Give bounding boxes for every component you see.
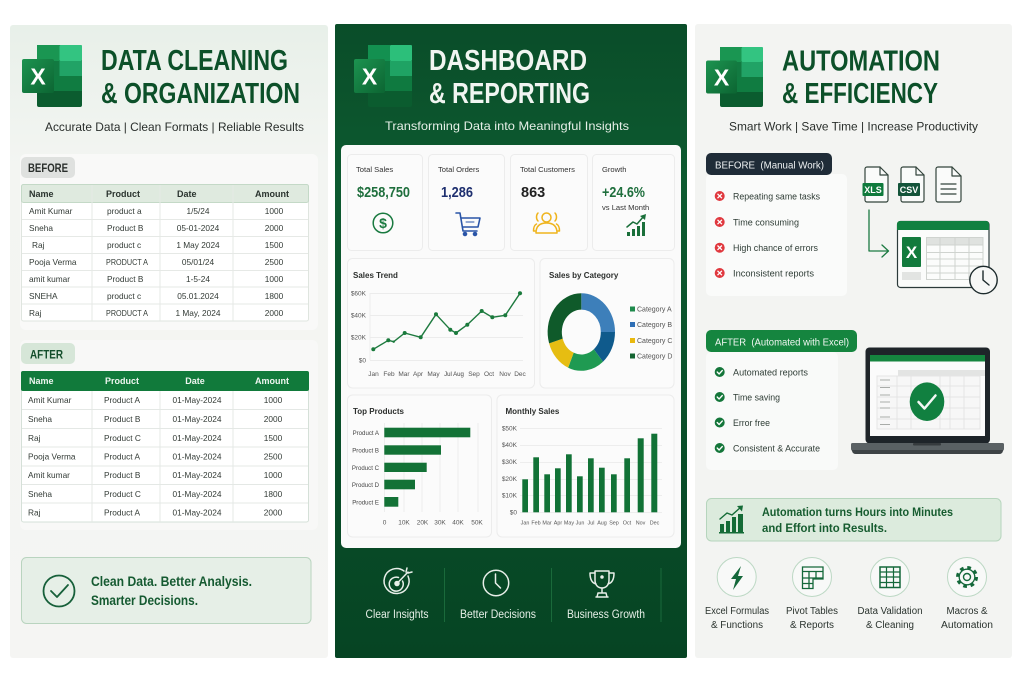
item: error free [715, 418, 770, 429]
chart: top products: Product E [352, 500, 379, 506]
legend: Category B [637, 322, 672, 329]
table: after: Pooja Verma [28, 452, 76, 462]
tag: before: BEFORE [28, 163, 68, 175]
table: after: Product C [104, 489, 141, 499]
benefit: clear insights [366, 568, 429, 621]
feature: data validation [858, 558, 922, 631]
chart: sales trend: $0 [359, 358, 366, 364]
icon: gear [948, 558, 986, 596]
table: after: Raj [28, 508, 41, 518]
chart: sales trend: Jan [368, 371, 379, 378]
table: after: Product A [104, 452, 140, 462]
table: before: Product [106, 189, 140, 199]
item: time consuming: Time consuming [733, 218, 799, 228]
illustration: laptop with check [851, 348, 1004, 454]
heading: data cleaning: & ORGANIZATION [101, 78, 300, 110]
icon: csv file: CSV [900, 185, 918, 195]
icon: trophy [590, 571, 614, 597]
panel: dashboard [335, 24, 687, 658]
chart: monthly sales: $40K [502, 442, 518, 449]
chart: top products: 20K [417, 520, 429, 526]
tag: after automated: AFTER (Automated with Excel) [715, 336, 849, 348]
heading: dashboard: DASHBOARD [429, 45, 587, 77]
chart: sales by category [540, 258, 674, 388]
icon: target [384, 568, 412, 594]
feature: pivot tables: Pivot Tables [786, 606, 838, 617]
chart: top products: 10K [398, 520, 410, 526]
table: before: amit kumar [29, 274, 70, 284]
table: after: Amount [255, 376, 289, 386]
chart: top products: 40K [452, 520, 464, 526]
table: after: 1000 [264, 470, 283, 480]
table: before: 2500 [265, 257, 284, 267]
subtitle: Smart Work | Save Time | Increase Productivity [729, 120, 978, 134]
tag: before manual work [706, 153, 832, 175]
chart: top products: Product D [352, 482, 380, 489]
icon: growth chart [719, 506, 744, 534]
item: error free: Error free [733, 418, 770, 429]
chart: sales trend: $60K [351, 290, 367, 298]
table: after: Amit Kumar [28, 395, 72, 405]
icon: excel logo [354, 45, 412, 107]
table: before: product c [107, 240, 141, 250]
before list [706, 153, 847, 296]
table: after: Product A [104, 508, 140, 518]
icon: csv file [898, 167, 924, 202]
table: after: Product C [104, 433, 141, 443]
chart: top products: 30K [434, 520, 446, 526]
chart: sales trend [348, 258, 534, 388]
table: before: 1/5/24 [186, 206, 210, 216]
table: after: 01-May-2024 [173, 414, 222, 424]
panel: data cleaning [10, 25, 328, 658]
chart: monthly sales: $10K [502, 492, 518, 500]
feature: pivot tables: & Reports [790, 620, 834, 631]
chart: sales trend: $20K [351, 334, 367, 342]
chart: monthly sales: Mar [542, 520, 552, 526]
chart: sales trend: Oct [484, 371, 494, 378]
table: after: Amit kumar [28, 470, 70, 480]
item: high chance of errors: High chance of errors [733, 243, 818, 254]
chart: top products: Product C [352, 465, 380, 472]
kpi: growth: +24.6% [602, 185, 645, 201]
kpi: total customers: Total Customers [520, 165, 575, 174]
chart: sales trend: Nov [499, 371, 512, 378]
table: before: product c [107, 291, 141, 301]
arrow: files to sheet [869, 210, 888, 257]
table: before: Amount [255, 189, 289, 199]
callout: clean data [22, 558, 311, 624]
feature: pivot tables [786, 558, 838, 631]
chart: monthly sales: Apr [554, 520, 562, 526]
table: before: Product B [107, 223, 144, 233]
table: before: PRODUCT A [106, 257, 148, 267]
table: before: 2000 [265, 308, 284, 318]
feature: excel formulas [705, 558, 769, 631]
table: after: 01-May-2024 [173, 470, 222, 480]
chart: sales trend: $40K [351, 312, 367, 320]
icon: people [534, 213, 560, 233]
legend: Category D [637, 354, 672, 360]
benefit: better decisions [460, 570, 536, 621]
heading: dashboard: & REPORTING [429, 78, 590, 110]
table: before: SNEHA [29, 291, 58, 301]
icon: grid [870, 558, 910, 596]
table: before: 2000 [265, 223, 284, 233]
table: after: Product [105, 376, 139, 386]
chart: sales trend: Dec [514, 371, 527, 378]
table: after: 01-May-2024 [173, 433, 222, 443]
table: after: 01-May-2024 [173, 508, 222, 518]
table: before: 05/01/24 [182, 257, 215, 267]
table: before: Amit Kumar [29, 206, 73, 216]
icon: xls file [862, 167, 888, 202]
heading: dashboard [429, 45, 590, 110]
item: inconsistent reports: Inconsistent reports [733, 268, 814, 280]
item: consistent and accurate: Consistent & Accurate [733, 444, 820, 454]
item: time saving [715, 392, 780, 404]
chart: top products: Top Products [353, 407, 405, 416]
icon: excel logo [706, 47, 763, 107]
callout: automation [706, 498, 1001, 541]
chart: monthly sales: $0 [510, 509, 517, 516]
chart: monthly sales: May [564, 520, 574, 526]
table: after: Product A [104, 395, 140, 405]
after list [706, 330, 857, 470]
chart: monthly sales: Nov [636, 520, 646, 526]
table: after [21, 371, 309, 522]
heading: data cleaning: DATA CLEANING [101, 45, 288, 77]
subtitle: Accurate Data | Clean Formats | Reliable Results [45, 120, 304, 134]
chart: monthly sales: Sep [609, 520, 619, 526]
table: before: Sneha [29, 223, 53, 233]
legend [630, 306, 672, 360]
icon: bolt [717, 558, 756, 596]
illustration: spreadsheet with clock: X [906, 243, 918, 262]
table: before: Name [29, 189, 54, 199]
table: before: 1500 [265, 240, 284, 250]
table: before: Pooja Verma [29, 257, 77, 267]
table: before: Date [177, 189, 197, 199]
table: after: Sneha [28, 414, 52, 424]
kpi: total orders: 1,286 [441, 185, 473, 201]
feature: data validation: & Cleaning [866, 620, 914, 631]
icon: excel logo [22, 45, 82, 107]
chart: top products: Product B [352, 448, 379, 454]
heading: automation: AUTOMATION [782, 46, 940, 78]
kpi: total sales: Total Sales [356, 165, 393, 174]
chart: monthly sales: $50K [502, 426, 518, 432]
chart: top products: 50K [471, 520, 483, 526]
table: after: 01-May-2024 [173, 452, 222, 462]
feature: excel formulas: Excel Formulas [705, 606, 769, 617]
kpi: total orders [428, 154, 504, 250]
table: after: Raj [28, 433, 41, 443]
icon: cart [456, 213, 480, 236]
tag: after: AFTER [30, 350, 64, 362]
tag: before [21, 157, 75, 178]
callout text [91, 574, 252, 608]
table: after: Date [185, 376, 205, 386]
chart: monthly sales: Jan [521, 520, 529, 526]
chart: monthly sales: $20K [502, 476, 518, 483]
chart: sales trend: May [427, 371, 440, 378]
chart: monthly sales: $30K [502, 459, 518, 466]
callout text [762, 505, 953, 535]
icon: check circle [44, 576, 74, 606]
table: before: 1000 [265, 206, 284, 216]
kpi: total sales [348, 154, 422, 250]
kpi: growth: Growth [602, 165, 626, 174]
chart: sales by category: Sales by Category [549, 271, 619, 280]
item: time saving: Time saving [733, 392, 780, 404]
feature: macros [941, 558, 993, 631]
item: automated reports: Automated reports [733, 368, 808, 378]
icon: document [936, 167, 961, 202]
illustration: spreadsheet with clock [897, 221, 997, 294]
table: before: 1 May, 2024 [175, 308, 221, 318]
icon: dollar: $ [379, 215, 387, 231]
kpi: total customers [510, 154, 588, 250]
kpi: growth [592, 154, 674, 250]
item: repeating same tasks: Repeating same tasks [733, 192, 820, 202]
chart: top products: 0 [383, 520, 387, 526]
legend: Category A [637, 306, 672, 314]
heading: automation [782, 46, 940, 110]
table: after: 2500 [264, 452, 283, 462]
feature: data validation: Data Validation [858, 606, 922, 617]
feature: excel formulas: & Functions [711, 620, 763, 631]
chart: top products [348, 395, 492, 537]
table: after: Product B [104, 470, 141, 480]
chart: monthly sales: Dec [650, 520, 660, 526]
benefit: better decisions: Better Decisions [460, 609, 536, 621]
table: before: Product B [107, 274, 144, 284]
icon: big check [910, 382, 944, 421]
feature: macros: Macros & [946, 606, 988, 617]
chart: sales trend: Sales Trend [353, 271, 398, 280]
table: after: 01-May-2024 [173, 395, 222, 405]
before section [20, 154, 318, 330]
table: after: 1000 [264, 395, 283, 405]
icon: clock [483, 570, 509, 596]
legend: Category C [637, 338, 672, 345]
callout text: Smarter Decisions. [91, 593, 198, 608]
panel: automation [695, 24, 1012, 658]
table: before: PRODUCT A [106, 308, 148, 318]
subtitle: Transforming Data into Meaningful Insights [385, 119, 629, 133]
chart: top products: Product A [353, 430, 380, 437]
table: before: product a [107, 206, 142, 216]
chart: monthly sales: Oct [623, 520, 632, 526]
tag: before manual work: BEFORE (Manual Work) [715, 160, 824, 172]
table: before: 05-01-2024 [177, 223, 220, 233]
icon: growth chart [627, 214, 646, 236]
after section [20, 340, 318, 530]
table: after: 1800 [264, 489, 283, 499]
table: before: 1 May 2024 [176, 240, 220, 250]
icon: xls file: XLS [864, 185, 882, 195]
table: after: Product B [104, 414, 141, 424]
table: after: 01-May-2024 [173, 489, 222, 499]
icon: excel logo: X [362, 64, 378, 90]
chart: monthly sales: Aug [597, 520, 607, 526]
kpi: total sales: $258,750 [357, 185, 410, 201]
heading: data cleaning [101, 45, 300, 110]
chart: monthly sales: Jul [588, 520, 594, 526]
kpi: total orders: Total Orders [438, 165, 480, 174]
kpi: growth: vs Last Month [602, 203, 649, 212]
chart: sales trend: Apr [413, 371, 424, 378]
callout text: and Effort into Results. [762, 521, 887, 535]
table: after: 1500 [264, 433, 283, 443]
benefit: business growth [567, 571, 645, 621]
icon: excel logo: X [30, 64, 46, 90]
callout text: Clean Data. Better Analysis. [91, 574, 252, 589]
chart: sales trend: Sep [468, 371, 480, 378]
table: before [22, 184, 308, 321]
chart: monthly sales [497, 395, 674, 537]
table: after: Sneha [28, 489, 52, 499]
kpi: total customers: 863 [521, 185, 545, 201]
chart: sales trend: Feb [383, 371, 395, 378]
chart: sales trend: Aug [453, 371, 464, 378]
table: after: 2000 [264, 414, 283, 424]
table: before: 05.01.2024 [177, 291, 219, 301]
chart: monthly sales: Jun [576, 520, 584, 526]
chart: sales trend: Jul [444, 371, 452, 378]
donut chart [555, 301, 608, 363]
chart: monthly sales: Monthly Sales [506, 407, 560, 416]
dashboard card [341, 145, 681, 548]
icon: excel logo: X [714, 64, 730, 90]
table: before: 1000 [265, 274, 284, 284]
callout text: Automation turns Hours into Minutes [762, 505, 953, 519]
tag: after automated [706, 330, 857, 352]
table: before: 1-5-24 [186, 274, 210, 284]
table: before: Raj [29, 308, 42, 318]
heading: automation: & EFFICIENCY [782, 78, 938, 110]
tag: after [21, 343, 75, 364]
feature: macros: Automation [941, 620, 993, 631]
table: before: Raj [32, 240, 45, 250]
icon: pivot table [792, 558, 832, 596]
icon: clock [970, 266, 997, 294]
chart: sales trend: Mar [398, 371, 410, 378]
table: before: 1800 [265, 291, 284, 301]
table: after: Name [29, 376, 54, 386]
chart: monthly sales: Feb [531, 520, 541, 526]
benefit: clear insights: Clear Insights [366, 609, 429, 621]
table: after: 2000 [264, 508, 283, 518]
benefit: business growth: Business Growth [567, 609, 645, 621]
